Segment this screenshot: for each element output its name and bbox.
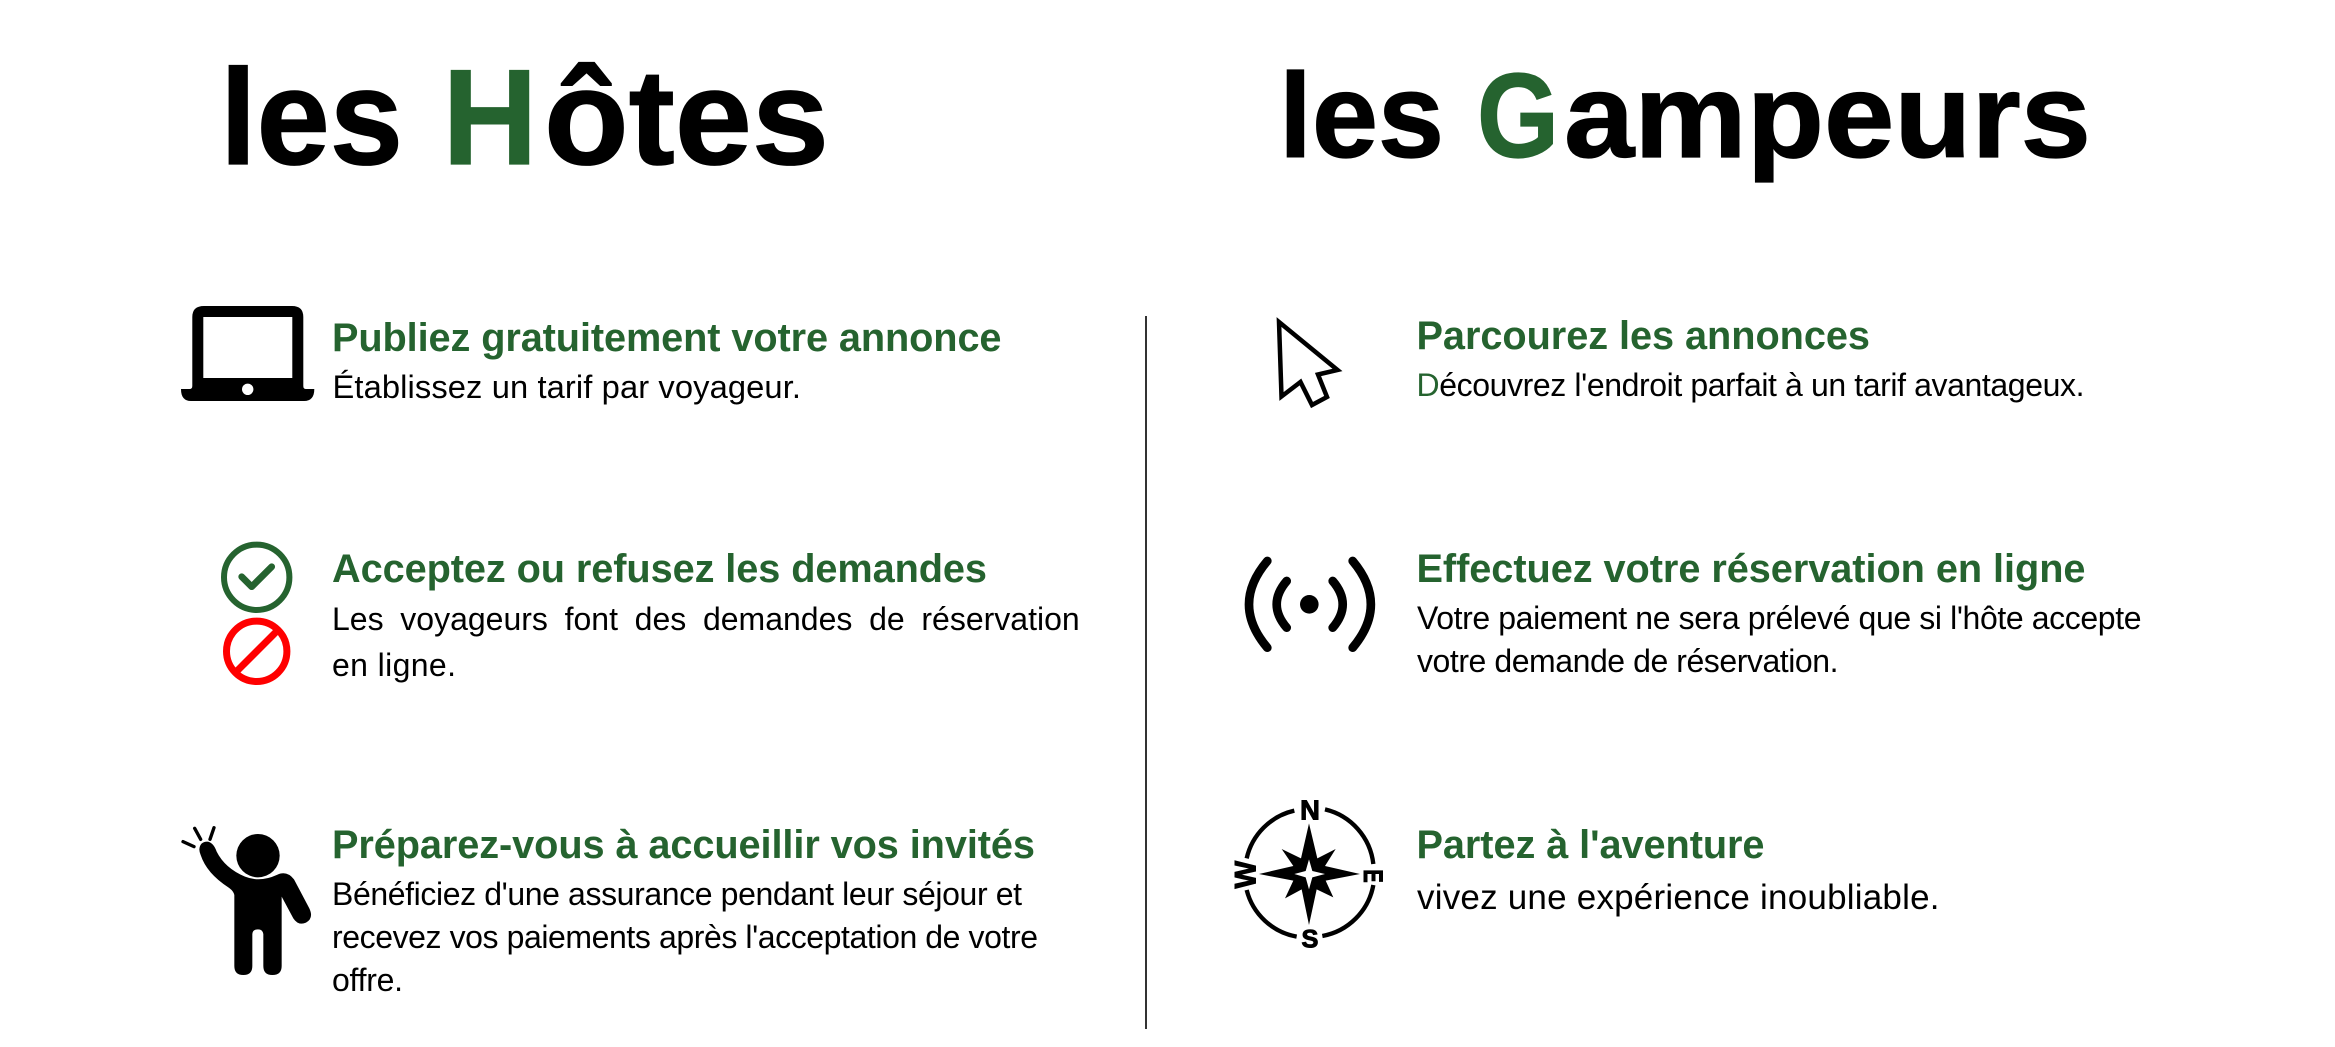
heading: Effectuez: Effectuez votre réservation en ligne [1416,547,2086,591]
body text [332,876,1038,998]
panel: camper step 3 [1230,794,1940,953]
icon: person waving [183,828,311,975]
panel: host step 3 [183,823,1038,998]
title: les Hôtes: les [220,41,403,193]
icon: broadcast signal [1249,561,1371,648]
title: les Hôtes: ôtes [544,41,829,193]
body text: en ligne. [332,647,456,683]
title: les Gampeurs: G [1477,49,1559,183]
icon: compass rose: N [1300,794,1320,825]
icon: laptop [181,306,314,401]
panel: host step 2 [224,545,1080,683]
heading: Préparez-vous: Préparez-vous à accueillir vos invités [332,823,1035,867]
icon: compass rose: W [1230,861,1263,889]
body text: offre. [332,962,403,998]
icon: red prohibition sign [227,621,287,682]
icon: green check in circle [224,545,289,610]
icon: mouse cursor [1279,322,1338,405]
body text: vivez une expérience inoubliable. [1417,878,1940,917]
heading: Partez: Partez à l'aventure [1416,823,1764,867]
title: les Gampeurs: les [1279,49,1444,183]
icon: compass rose: S [1302,925,1318,953]
body text: Les voyageurs font des demandes de réservation [332,601,1080,637]
body text [1417,600,2142,679]
panel: camper step 2 [1249,547,2142,679]
body text: votre demande de réservation. [1417,643,1838,679]
body text: Votre paiement ne sera prélevé que si l'hôte accepte [1417,600,2142,636]
panel: camper step 1 [1279,314,2084,405]
body text: Établissez un tarif par voyageur. [332,368,801,405]
icon: compass rose: E [1358,869,1388,883]
body text: Bénéficiez d'une assurance pendant leur séjour et [332,876,1022,912]
body text [332,601,1080,683]
body text: Découvrez l'endroit parfait à un tarif avantageux. [1416,367,2084,403]
heading: Publiez: Publiez gratuitement votre annonce [332,316,1002,360]
heading: Acceptez: Acceptez ou refusez les demandes [332,547,987,591]
panel: host step 1 [181,306,1002,405]
title: les Gampeurs: ampeurs [1564,49,2091,183]
heading: Parcourez: Parcourez les annonces [1416,314,1870,358]
body text: recevez vos paiements après l'acceptation de votre [332,919,1038,955]
icon: compass rose [1230,794,1388,953]
title: les Hôtes: H [442,41,538,193]
